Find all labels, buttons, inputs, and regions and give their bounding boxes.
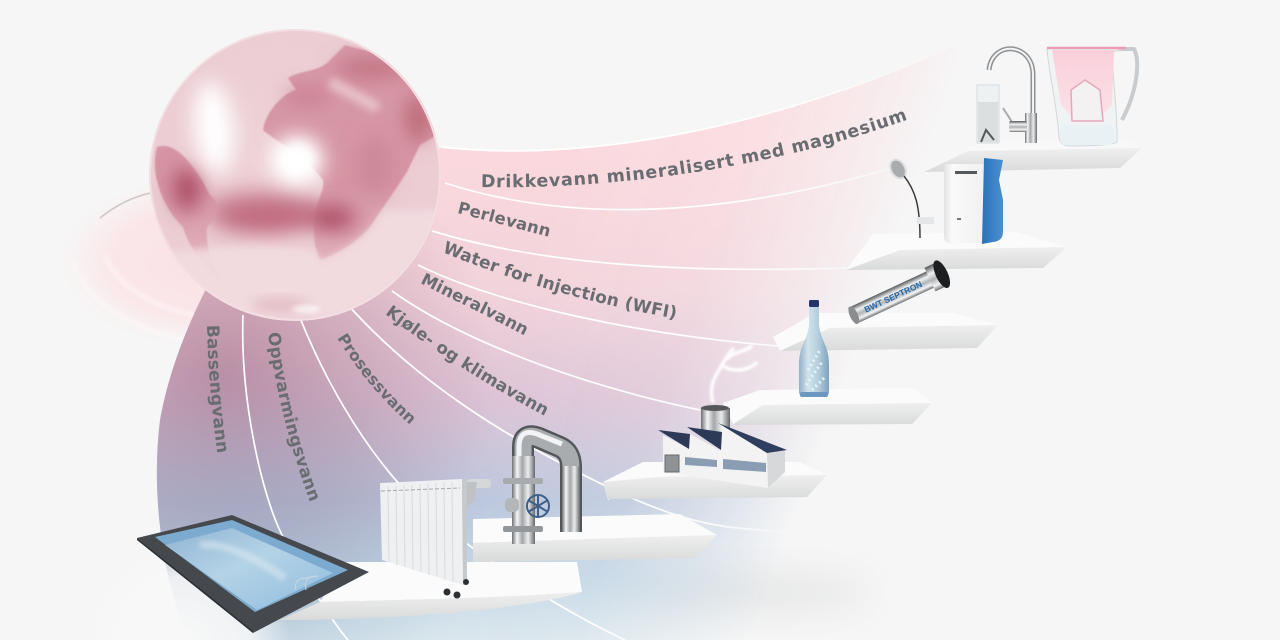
steam [711, 345, 757, 403]
label: Kjøle- og klimavann: Kjøle- og klimavann [386, 305, 547, 416]
icon: glass of water [977, 85, 999, 143]
label: Bassengvann: Bassengvann [207, 326, 226, 452]
pale lower band [174, 210, 434, 321]
icon: factory [658, 345, 787, 488]
label: Water for Injection (WFI): Water for Injection (WFI) [445, 240, 676, 320]
shelf 4 [723, 388, 932, 425]
icon: BWT Septron cartridge [844, 258, 954, 330]
pale Europe / Mediterranean band [330, 82, 378, 108]
icon: process pipe with valve [503, 433, 580, 544]
label: Perlevann: Perlevann [458, 202, 550, 236]
icon: pink filter jug [1047, 48, 1137, 146]
dark red shading bands [174, 58, 429, 230]
icon: radiator [380, 478, 491, 598]
icon: BWT Septron cartridge: BWT SEPTRON [863, 279, 924, 315]
colour fan of water types [156, 68, 905, 640]
water ripples around the globe [60, 177, 340, 350]
label: Oppvarmingsvann: Oppvarmingsvann [266, 332, 318, 502]
shelf 2 [846, 232, 1067, 270]
label: Drikkevann mineralisert med magnesium: Drikkevann mineralisert med magnesium [482, 112, 906, 188]
shelf 1 [923, 140, 1142, 172]
icon: mineral water bottle [799, 300, 829, 397]
icon: kitchen faucet [989, 49, 1037, 143]
continents [154, 44, 436, 260]
globe [149, 29, 445, 321]
icon: water softener unit [944, 158, 1003, 244]
icon: shower head [887, 157, 934, 238]
shelf 3 [773, 313, 998, 351]
highlights [189, 80, 324, 185]
label: Prosessvann: Prosessvann [338, 333, 414, 424]
rose shading across the ocean [202, 190, 322, 234]
white fade at the bottom-left of the fan [60, 530, 300, 640]
label: Mineralvann: Mineralvann [421, 272, 527, 335]
white dividing lines [243, 44, 955, 640]
icon: swimming pool [137, 515, 369, 633]
shelf 6 [473, 514, 717, 562]
floor shadow [590, 572, 870, 612]
stair shelves [280, 140, 1142, 620]
shelf 7 [280, 562, 582, 620]
shelf 5 [603, 462, 827, 500]
